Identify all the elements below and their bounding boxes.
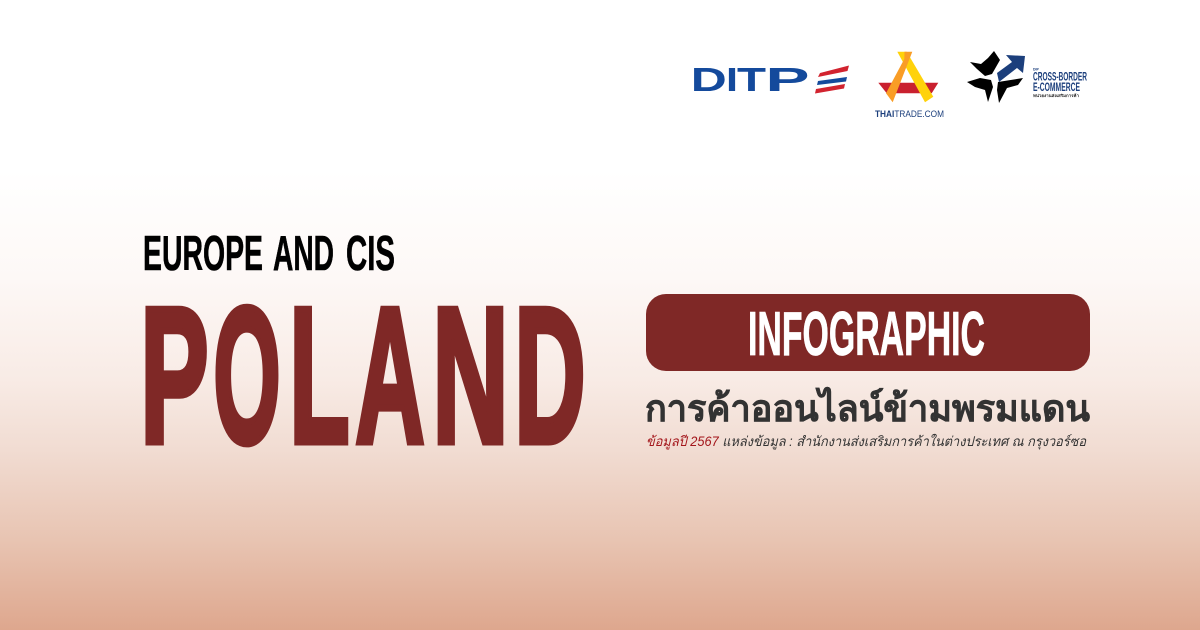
title: Poland: A [356, 267, 424, 483]
title: Poland: O [214, 267, 280, 483]
logo: Cross-Border E-Commerce: E-COMMERCE [1033, 80, 1080, 94]
heading: Europe and CIS: CIS [346, 227, 395, 281]
logo: Cross-Border E-Commerce: หน่วยงานส่งเสริมการค้า [1033, 92, 1079, 98]
subtitle: Thai cross-border online trade: การค้าออนไลน์ข้ามพรมแดน [645, 386, 1090, 429]
logo: Thaitrade [875, 52, 944, 120]
logo: DITP: T [737, 61, 766, 98]
heading: Europe and CIS: EUROPE [143, 227, 263, 281]
logo: Thaitrade: THAITRADE.COM [875, 109, 944, 120]
logo: Cross-Border E-Commerce: DIP [1033, 68, 1040, 72]
source note: ข้อมูลปี 2567 แหล่งข้อมูล : สำนักงานส่งเสริมการค้าในต่างประเทศ ณ กรุงวอร์ซอ [646, 433, 1087, 450]
logo: Cross-Border E-Commerce: CROSS-BORDER [1033, 70, 1087, 84]
logo: Cross-Border E-Commerce [967, 51, 1087, 103]
title: Poland: D [514, 267, 586, 483]
title: Poland: N [432, 267, 508, 483]
badge: Infographic [646, 294, 1090, 371]
title: Poland [140, 267, 586, 483]
title: Poland: P [140, 267, 208, 483]
logo: DITP: P [766, 61, 810, 98]
logo: DITP: I [726, 61, 738, 98]
logo: DITP: D [691, 61, 727, 98]
title: Poland: L [290, 267, 350, 483]
badge: Infographic: INFOGRAPHIC [748, 300, 985, 369]
heading: Europe and CIS: AND [273, 227, 334, 281]
logo: DITP [691, 61, 849, 98]
